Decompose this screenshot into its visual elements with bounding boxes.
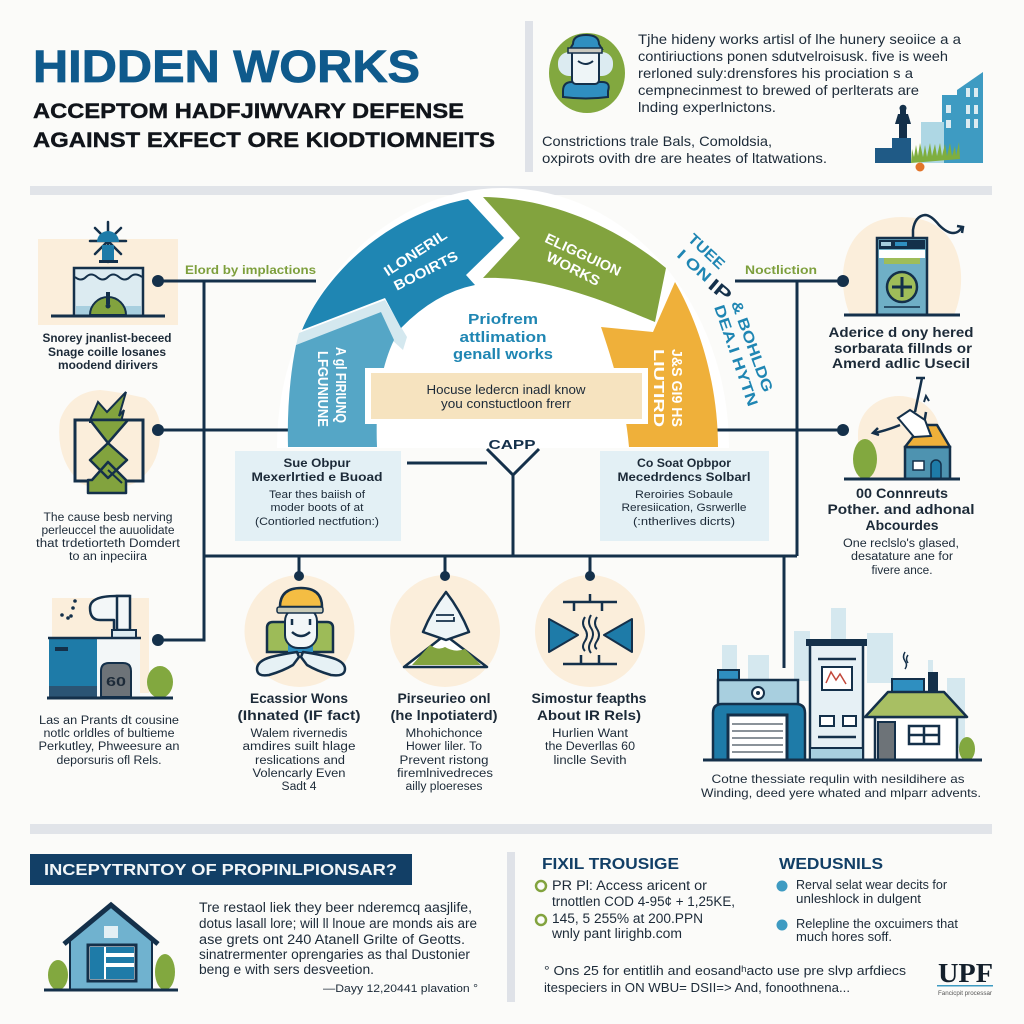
arch segment: orange: LIUTIRD	[650, 349, 667, 427]
text: first right note	[828, 324, 974, 371]
column one text: Sadt 4	[282, 781, 317, 793]
connector lines	[152, 275, 849, 668]
icon: mountain and kite	[390, 575, 500, 687]
curved side label: I ON	[673, 246, 714, 286]
title: AGAINST EXFECT ORE KIODTIOMNEITS	[33, 129, 495, 152]
text: third left note: deporsuris ofl Rels.	[56, 755, 162, 767]
centre callout	[365, 368, 648, 424]
column one text	[238, 690, 360, 793]
connector label right: Noctliction	[745, 265, 817, 277]
centre heading: attlimation	[460, 329, 546, 346]
arch segment: green: ELIGGUION	[543, 230, 624, 279]
column one text: (Ihnated (IF fact)	[238, 707, 360, 723]
logo: UPF: UPF	[938, 958, 993, 988]
icon: city and statue	[875, 72, 983, 172]
centre heading	[453, 311, 553, 363]
panel: left info box: moder boots of at	[270, 502, 364, 514]
column three text: About IR Rels)	[537, 707, 641, 723]
text: third left note: Perkutley, Phweesure an	[38, 741, 180, 753]
section: fixil trousige: PR Pl: Access aricent or	[552, 878, 708, 893]
arch segment: dark blue: BOOIRTS	[391, 248, 461, 294]
icon: worker avatar	[549, 33, 625, 113]
curved side label	[673, 230, 776, 409]
centre callout: Hocuse ledercn inadl know	[426, 383, 587, 397]
intro text	[638, 31, 961, 115]
section: fixil trousige: 145, 5 255% at 200.PPN	[552, 911, 703, 926]
intro text: rerloned suly:drensfores his prociation s a	[638, 65, 913, 81]
text: second right note: desatature ane for	[851, 551, 953, 563]
body paragraph: —Dayy 12,20441 plavation °	[323, 983, 478, 995]
column two text: ailly ploereses	[406, 781, 483, 793]
intro text: Tjhe hideny works artisl of lhe hunery seoiice a a	[638, 31, 961, 47]
text: building caption	[701, 772, 981, 800]
text: second left note	[36, 512, 181, 563]
panel: left info box: Sue Obpur	[284, 456, 351, 470]
centre callout: you constuctloon frerr	[441, 397, 571, 411]
heading banner	[30, 854, 412, 885]
text: second right note: One reclslo's glased,	[843, 538, 959, 550]
intro text: contiriuctions ponen sdutvelroisusk. five is weeh	[638, 48, 948, 64]
icon: pressure valve	[535, 575, 645, 687]
icon: dispenser	[843, 215, 963, 315]
column two text: Hower liler. To	[406, 741, 482, 753]
title: HIDDEN WORKS	[33, 41, 420, 92]
panel: right info box: Reresiication, Gsrwerlle	[622, 502, 746, 514]
text: second right note: Abcourdes	[866, 517, 939, 533]
arch segment: green	[483, 197, 666, 322]
text: first right note: Amerd adlic Usecil	[832, 355, 970, 371]
column three text: Hurlien Want	[552, 728, 629, 740]
text: second right note: fivere ance.	[872, 565, 932, 577]
text: first left note: moodend dirivers	[58, 360, 158, 372]
text: first right note: sorbarata fillnds or	[834, 340, 973, 356]
column one text: Walem rivernedis	[250, 728, 348, 740]
text: building caption: Winding, deed yere whated and mlparr advents.	[701, 786, 981, 800]
section: fixil trousige	[536, 856, 735, 941]
section: fixil trousige: trnottlen COD 4-95¢ + 1,25KE,	[552, 894, 735, 909]
curved side label: DEA.I HYTN	[710, 303, 761, 409]
section: wedusnils: Relepline the oxcuimers that	[796, 916, 958, 931]
icon: tank alert	[38, 222, 178, 325]
section: wedusnils: Rerval selat wear decits for	[796, 877, 948, 892]
text: second right note: 00 Connreuts	[856, 485, 948, 501]
column three text: linclle Sevith	[554, 755, 626, 767]
panel: right info box	[600, 451, 769, 541]
arch segment: dark blue: ILONERIL	[381, 226, 450, 279]
label: CAPP: CAPP	[488, 437, 536, 452]
body paragraph: beng e with sers desveetion.	[199, 962, 374, 977]
centre heading: genall works	[453, 346, 553, 363]
icon: smiling worker	[244, 575, 354, 687]
curved side label: TUEE	[684, 230, 728, 273]
text: second left note: that trdetiorteth Domdert	[36, 538, 181, 550]
column three text	[532, 690, 647, 767]
footnote	[544, 963, 907, 995]
section: fixil trousige: wnly pant lirighb.com	[551, 926, 682, 941]
icon: breach diamonds	[59, 390, 160, 493]
panel: left info box: Tear thes baiish of	[269, 489, 366, 501]
arch segment: orange: J&S GI9 HS	[668, 349, 685, 427]
illustration: buildings	[703, 608, 982, 761]
intro text: cempnecinmest to brewed of perlterats are	[638, 82, 919, 98]
body paragraph: Tre restaol liek they beer nderemcq aasjlife,	[199, 900, 472, 915]
panel: left info box: (Contiorled nectfution:)	[255, 516, 379, 528]
column two text: Pirseurieo onl	[398, 690, 490, 706]
panel: right info box: Co Soat Opbpor	[637, 456, 731, 470]
text: third left note: Las an Prants dt cousine	[39, 715, 179, 727]
title: ACCEPTOM HADFJIWVARY DEFENSE	[33, 100, 464, 123]
text: first left note: Snage coille losanes	[48, 347, 166, 359]
arch segment: light blue: A gl FIRIUNQ	[332, 347, 349, 423]
central arch diagram	[288, 197, 718, 447]
section: wedusnils: much hores soff.	[796, 929, 892, 944]
body paragraph: sinatrermenter oprengaries as thal Dustonier	[199, 947, 471, 962]
footnote: itespeciers in ON WBU= DSII=> And, fonoothnena...	[544, 980, 850, 995]
title	[33, 41, 495, 152]
arch segment: light blue: LFGUNIUNE	[314, 351, 331, 427]
text: second right note	[828, 485, 974, 577]
column two text: Prevent ristong	[400, 755, 488, 767]
arch segment: green: WORKS	[544, 248, 603, 289]
text: third left note	[38, 715, 180, 767]
arch segment: light blue	[288, 312, 394, 447]
column one text: reslications and	[255, 755, 345, 767]
body paragraph: ase grets ont 240 Atanell Grilte of Geotts.	[199, 932, 465, 947]
curved side label: IP	[704, 275, 736, 305]
panel: left info box: Mexerlrtied e Buoad	[252, 470, 382, 484]
intro text: lnding experlnictons.	[638, 99, 776, 115]
panel: right info box: Mecedrdencs Solbarl	[618, 470, 750, 484]
column two text: Mhohichonce	[406, 728, 482, 740]
text: second left note: perleuccel the auuolidate	[42, 525, 174, 537]
column three text: Simostur feapths	[532, 690, 647, 706]
secondary intro text	[542, 133, 827, 166]
section: fixil trousige: FIXIL TROUSIGE	[542, 856, 679, 873]
text: first left note	[42, 333, 172, 372]
secondary intro text: oxpirots ovith dre are heates of ltatwations.	[542, 150, 827, 166]
arch segment: dark blue	[302, 199, 504, 330]
panel: left info box	[235, 451, 401, 541]
icon: house	[44, 905, 178, 990]
footnote: ° Ons 25 for entitlih and eosandʰacto use pre slvp arfdiecs	[544, 963, 907, 978]
body paragraph	[199, 900, 478, 995]
text: second right note: Pother. and adhonal	[828, 501, 974, 517]
connector label left: Elord by implactions	[185, 265, 316, 277]
column three text: the Deverllas 60	[545, 741, 635, 753]
secondary intro text: Constrictions trale Bals, Comoldsia,	[542, 133, 772, 149]
icon: water heater: 60	[106, 674, 126, 689]
text: building caption: Cotne thessiate requlin with nesildihere as	[712, 772, 964, 786]
curved side label: & BOHLDG	[727, 299, 776, 395]
arch segment: orange	[601, 282, 718, 447]
column one text: Volencarly Even	[252, 768, 346, 780]
centre heading: Priofrem	[468, 311, 538, 328]
text: third left note: notlc orldles of bultieme	[44, 728, 174, 740]
column one text: amdires suilt hlage	[242, 741, 356, 753]
text: second left note: The cause besb nerving	[44, 512, 172, 524]
icon: water heater	[47, 596, 173, 698]
logo: UPF: Fancicpit processar	[938, 990, 993, 997]
section: wedusnils: unleshlock in dulgent	[796, 891, 921, 906]
panel: right info box: (:ntherlives dicrts)	[633, 516, 735, 528]
column one text: Ecassior Wons	[250, 690, 348, 706]
section: wedusnils	[776, 856, 958, 944]
heading banner: INCEPYTRNTOY OF PROPINLPIONSAR?	[44, 862, 397, 879]
column two text: (he lnpotiaterd)	[390, 707, 498, 723]
body paragraph: dotus lasall lore; will ll lnoue are monds ais are	[199, 916, 477, 931]
text: second left note: to an inpeciira	[69, 551, 148, 563]
panel: right info box: Reroiries Sobaule	[635, 489, 733, 501]
icon: house repair	[844, 378, 960, 479]
text: first left note: Snorey jnanlist-beceed	[42, 333, 172, 345]
section: wedusnils: WEDUSNILS	[779, 856, 883, 873]
column two text	[390, 690, 498, 793]
text: first right note: Aderice d ony hered	[828, 324, 974, 340]
column two text: firemlnivedreces	[397, 768, 493, 780]
